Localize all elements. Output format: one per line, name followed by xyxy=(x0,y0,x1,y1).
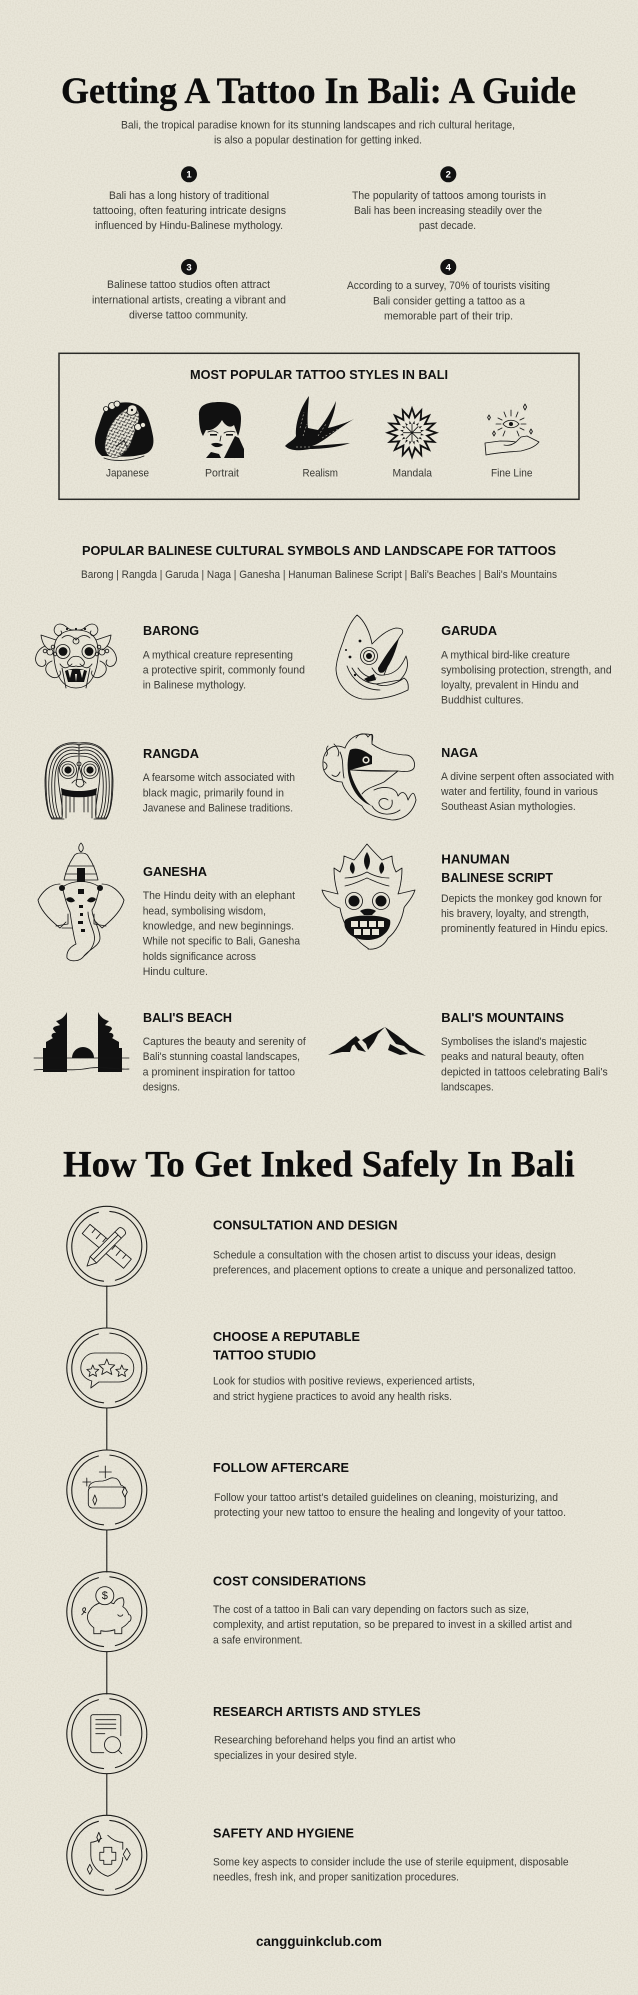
icon: barong mask xyxy=(36,624,116,688)
heading: RANGDA xyxy=(143,747,199,761)
fact 4 xyxy=(347,259,550,322)
intro text: is also a popular destination for getting inked. xyxy=(214,135,422,147)
description xyxy=(213,1856,569,1883)
title: how to get inked safely: How To Get Inked Safely In Bali xyxy=(63,1145,575,1186)
style labels: Fine Line xyxy=(491,467,533,479)
icon: portrait xyxy=(199,402,244,458)
step: research artists and styles xyxy=(67,1694,456,1774)
icon: cream jar xyxy=(67,1450,147,1530)
description: a prominent inspiration for tattoo xyxy=(143,1066,295,1078)
description xyxy=(440,771,614,813)
fact 1: tattooing, often featuring intricate designs xyxy=(93,205,286,217)
icon: hanuman mask xyxy=(322,844,415,949)
description: a safe environment. xyxy=(213,1634,302,1646)
fact 3: 3 xyxy=(186,262,192,273)
description xyxy=(143,772,295,815)
symbol: naga xyxy=(323,734,614,820)
icon: mountains xyxy=(328,1027,426,1056)
description: symbolising protection, strength, and xyxy=(441,664,612,676)
title: Getting A Tattoo In Bali: A Guide xyxy=(61,71,576,112)
description xyxy=(143,650,305,692)
panel heading: MOST POPULAR TATTOO STYLES IN BALI xyxy=(190,368,448,382)
symbol: barong xyxy=(36,624,305,692)
icon: realism swallow xyxy=(285,396,354,450)
footer website: cangguinkclub.com xyxy=(256,1934,382,1949)
symbol: bali's beach xyxy=(34,1011,306,1094)
description: Southeast Asian mythologies. xyxy=(441,801,576,813)
icon: shield with cross xyxy=(67,1815,147,1895)
description: A fearsome witch associated with xyxy=(143,772,295,784)
description: designs. xyxy=(143,1082,180,1094)
description: While not specific to Bali, Ganesha xyxy=(143,936,300,948)
description: Buddhist cultures. xyxy=(441,695,524,707)
heading: CONSULTATION AND DESIGN xyxy=(213,1218,398,1232)
description: holds significance across xyxy=(143,951,256,963)
intro text xyxy=(121,119,515,147)
icon: piggy bank xyxy=(67,1572,147,1652)
section heading: cultural symbols: POPULAR BALINESE CULTURAL SYMBOLS AND LANDSCAPE FOR TATTOOS xyxy=(82,544,556,558)
fact 3 xyxy=(92,259,286,321)
fact 1: 1 xyxy=(186,170,192,181)
description: A divine serpent often associated with xyxy=(441,771,614,783)
description: The Hindu deity with an elephant xyxy=(143,890,295,902)
description xyxy=(214,1735,456,1762)
fact 1: influenced by Hindu-Balinese mythology. xyxy=(95,220,283,232)
heading: CHOOSE A REPUTABLE xyxy=(213,1330,360,1344)
style labels: Mandala xyxy=(392,467,432,479)
description: water and fertility, found in various xyxy=(440,786,598,798)
description: protecting your new tattoo to ensure the healing and longevity of your tattoo. xyxy=(214,1507,566,1519)
intro text: Bali, the tropical paradise known for its stunning landscapes and rich cultural heritage, xyxy=(121,119,515,131)
description: The cost of a tattoo in Bali can vary depending on factors such as size, xyxy=(213,1604,529,1616)
step: safety and hygiene xyxy=(67,1815,569,1895)
description: Schedule a consultation with the chosen artist to discuss your ideas, design xyxy=(213,1250,556,1262)
heading: BALI'S BEACH xyxy=(143,1011,232,1025)
description xyxy=(441,650,612,707)
description xyxy=(213,1376,475,1403)
description: Bali's stunning coastal landscapes, xyxy=(143,1051,300,1063)
style labels: Portrait xyxy=(205,467,239,479)
description: Some key aspects to consider include the use of sterile equipment, disposable xyxy=(213,1856,569,1868)
heading: HANUMAN xyxy=(441,853,510,867)
description: black magic, primarily found in xyxy=(143,788,284,800)
icon: review bubble with stars xyxy=(67,1328,147,1408)
heading: BARONG xyxy=(143,624,199,638)
style labels xyxy=(106,467,533,479)
heading: TATTOO STUDIO xyxy=(213,1348,316,1362)
description xyxy=(143,890,300,978)
fact 3: international artists, creating a vibrant and xyxy=(92,294,286,306)
description: peaks and natural beauty, often xyxy=(441,1051,584,1063)
description: Depicts the monkey god known for xyxy=(441,893,602,905)
fact 2: The popularity of tattoos among tourists in xyxy=(352,190,546,202)
fact 3: Balinese tattoo studios often attract xyxy=(107,279,270,291)
description: his bravery, loyalty, and strength, xyxy=(441,908,589,920)
symbol: rangda xyxy=(45,743,295,819)
description: landscapes. xyxy=(441,1082,494,1094)
symbol: hanuman xyxy=(322,844,608,949)
description: Hindu culture. xyxy=(143,966,208,978)
description: Symbolises the island's majestic xyxy=(441,1036,587,1048)
description: Captures the beauty and serenity of xyxy=(143,1036,306,1048)
fact 1: Bali has a long history of traditional xyxy=(109,190,269,202)
fact 4: According to a survey, 70% of tourists visiting xyxy=(347,280,550,292)
description: depicted in tattoos celebrating Bali's xyxy=(441,1066,608,1078)
heading xyxy=(441,853,553,885)
heading: RESEARCH ARTISTS AND STYLES xyxy=(213,1705,421,1719)
description: knowledge, and new beginnings. xyxy=(143,920,294,932)
fact 2: 2 xyxy=(446,170,451,181)
icon: document with magnifier xyxy=(67,1694,147,1774)
fact 3: diverse tattoo community. xyxy=(129,309,248,321)
description: in Balinese mythology. xyxy=(143,680,246,692)
fact 4: Bali consider getting a tattoo as a xyxy=(373,295,525,307)
fact 1 xyxy=(93,166,286,232)
panel: most popular tattoo styles xyxy=(59,353,579,499)
description: needles, fresh ink, and proper sanitization procedures. xyxy=(213,1871,459,1883)
heading: COST CONSIDERATIONS xyxy=(213,1574,366,1588)
description: Follow your tattoo artist's detailed guidelines on cleaning, moisturizing, and xyxy=(214,1492,558,1504)
description: A mythical bird-like creature xyxy=(441,650,570,662)
icon: fine line hand and eye xyxy=(485,404,539,455)
description xyxy=(213,1250,576,1277)
fact 4: memorable part of their trip. xyxy=(384,310,513,322)
symbol: ganesha xyxy=(38,843,300,978)
heading: SAFETY AND HYGIENE xyxy=(213,1827,354,1841)
style labels: Japanese xyxy=(106,467,149,479)
icon: ganesha xyxy=(38,843,124,961)
description xyxy=(441,893,608,935)
description: and strict hygiene practices to avoid any health risks. xyxy=(213,1391,452,1403)
icon: naga head xyxy=(323,734,416,820)
icon: piggy bank: $ xyxy=(102,1590,108,1602)
description: loyalty, prevalent in Hindu and xyxy=(441,680,579,692)
description: a protective spirit, commonly found xyxy=(143,664,305,676)
description: complexity, and artist reputation, so be prepared to invest in a skilled artist and xyxy=(213,1619,572,1631)
description: prominently featured in Hindu epics. xyxy=(441,923,608,935)
heading: FOLLOW AFTERCARE xyxy=(213,1461,349,1475)
icon: temple gate and sun xyxy=(34,1012,129,1072)
description xyxy=(213,1604,572,1646)
description xyxy=(143,1036,306,1094)
icon: rangda mask xyxy=(45,743,113,819)
description: head, symbolising wisdom, xyxy=(143,905,266,917)
description xyxy=(214,1492,566,1519)
icon: ruler and pencil xyxy=(67,1206,147,1286)
description: Javanese and Balinese traditions. xyxy=(143,803,293,815)
description: specializes in your desired style. xyxy=(214,1750,357,1762)
description: preferences, and placement options to create a unique and personalized tattoo. xyxy=(213,1265,576,1277)
fact 2: past decade. xyxy=(419,220,476,232)
symbol: garuda xyxy=(336,615,612,707)
fact 4: 4 xyxy=(446,262,452,273)
heading: GANESHA xyxy=(143,865,207,879)
icon: garuda mask xyxy=(336,615,408,699)
heading: NAGA xyxy=(441,746,478,760)
symbol: bali's mountains xyxy=(328,1011,608,1094)
step: follow aftercare xyxy=(67,1450,566,1530)
heading: BALI'S MOUNTAINS xyxy=(441,1011,564,1025)
symbols list: Barong | Rangda | Garuda | Naga | Ganesha | Hanuman Balinese Script | Bali's Beaches | Bali's Mountains xyxy=(81,569,557,581)
heading: BALINESE SCRIPT xyxy=(441,871,553,885)
step: choose a reputable studio xyxy=(67,1328,475,1408)
step: consultation and design xyxy=(67,1206,576,1286)
description: Researching beforehand helps you find an artist who xyxy=(214,1735,456,1747)
icon: japanese koi xyxy=(95,401,153,460)
icon: mandala xyxy=(385,406,439,460)
heading: GARUDA xyxy=(441,624,497,638)
description xyxy=(441,1036,608,1094)
description: Look for studios with positive reviews, experienced artists, xyxy=(213,1376,475,1388)
heading xyxy=(213,1330,360,1362)
fact 2: Bali has been increasing steadily over the xyxy=(354,205,542,217)
timeline connector xyxy=(106,1286,108,1815)
description: A mythical creature representing xyxy=(143,650,293,662)
step: cost considerations xyxy=(67,1572,572,1652)
fact 2 xyxy=(352,166,546,232)
style labels: Realism xyxy=(302,467,338,479)
